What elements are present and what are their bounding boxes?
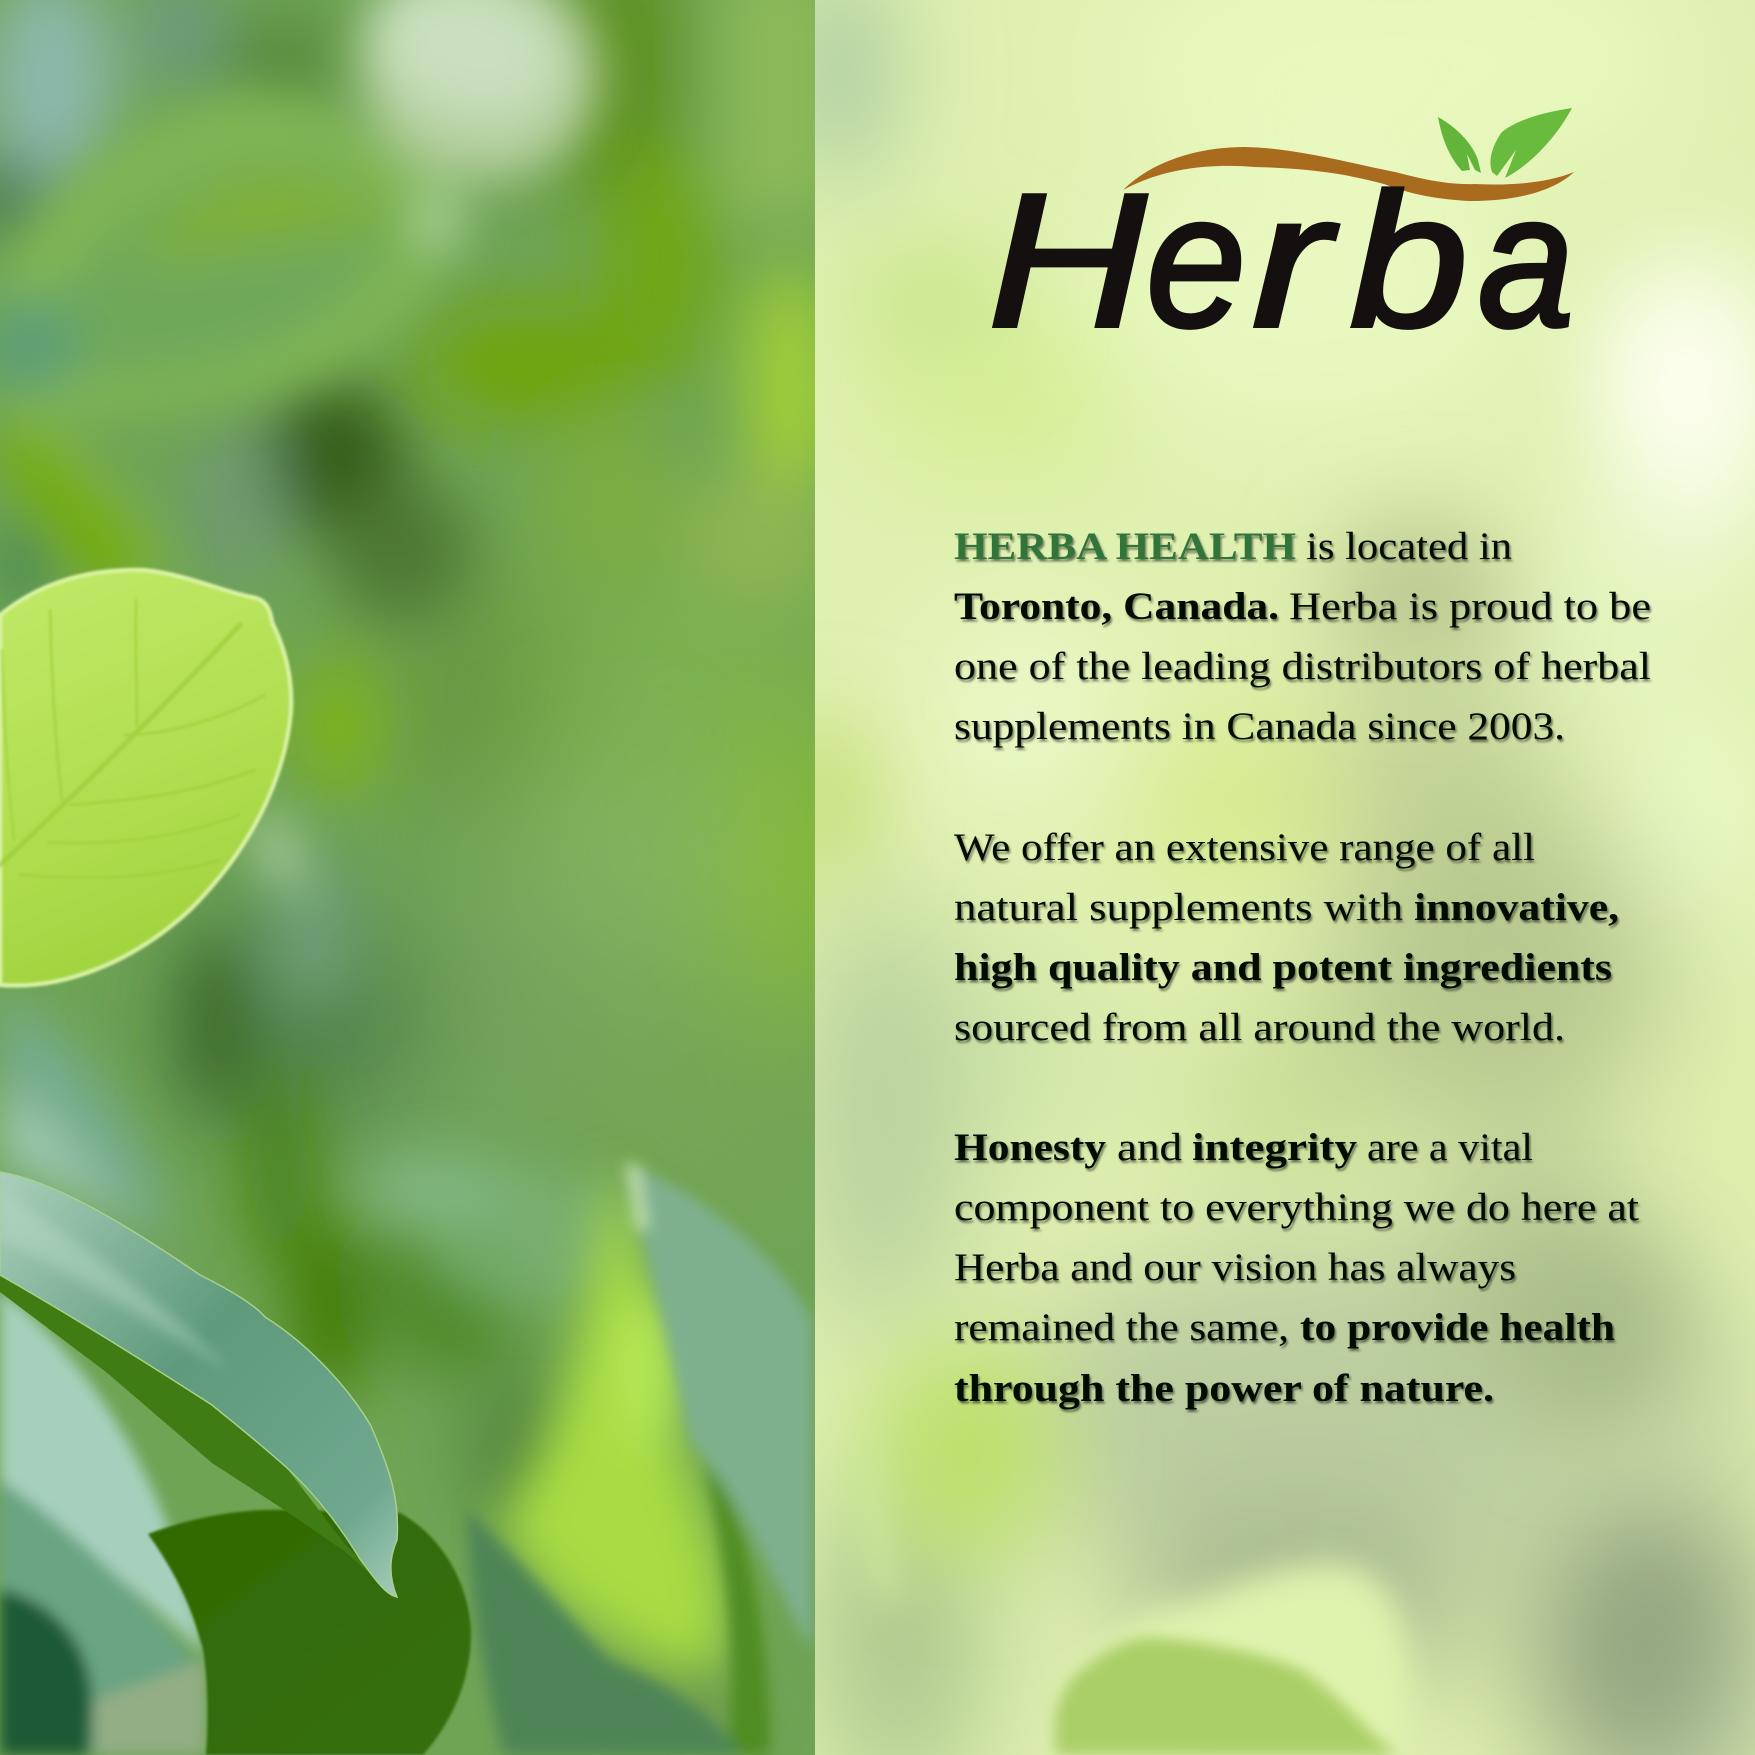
logo wordmark: b — [1350, 155, 1468, 367]
logo leaves — [1438, 117, 1481, 173]
logo wordmark: r — [1252, 155, 1338, 367]
streak near bright leaf — [250, 800, 310, 905]
text: paragraph 2: sourced from all around the world. — [954, 1006, 1565, 1049]
panel: right pale background — [780, 0, 1755, 1755]
logo: Herba — [988, 108, 1574, 367]
text: paragraph 3: through the power of nature. — [954, 1367, 1494, 1410]
text: paragraph 1: Toronto, Canada. — [954, 585, 1279, 628]
text: paragraph 2: We offer an extensive range of all — [954, 826, 1535, 869]
blurred bottom leaf — [1055, 1638, 1396, 1755]
panel: left leaf photograph — [0, 0, 850, 1755]
text: paragraph 1: one of the leading distributors of herbal — [954, 645, 1651, 688]
text: paragraph 1: supplements in Canada since 2003. — [954, 705, 1565, 748]
logo swoosh — [1123, 147, 1574, 201]
text: paragraph 3: integrity — [1192, 1126, 1358, 1169]
logo wordmark: a — [1478, 155, 1574, 367]
text: paragraph 1 — [954, 525, 1651, 748]
dark round leaf — [148, 1510, 471, 1755]
blurred upper leaf — [0, 96, 470, 417]
text: paragraph 3: and — [1117, 1126, 1183, 1169]
logo wordmark: H — [988, 155, 1147, 367]
lower blurred leaves — [0, 1290, 205, 1755]
text: paragraph 2 — [954, 826, 1619, 1049]
text: paragraph 3: to provide health — [1300, 1306, 1615, 1349]
text: paragraph 3: are a vital — [1367, 1126, 1533, 1169]
text: paragraph 1: Herba is proud to be — [1289, 585, 1651, 628]
text: paragraph 3: remained the same, — [954, 1306, 1289, 1349]
text: paragraph 3 — [954, 1126, 1639, 1410]
mid pale leaf band — [365, 1150, 515, 1230]
teal background leaf — [0, 990, 175, 1240]
left small leaf — [0, 409, 138, 569]
crisp bright leaf — [0, 570, 291, 986]
text: paragraph 2: innovative, — [1414, 886, 1619, 929]
text: paragraph 3: Honesty — [954, 1126, 1107, 1169]
logo wordmark: e — [1146, 155, 1246, 367]
text: paragraph 1: is located in — [1306, 525, 1512, 568]
main teal leaf — [0, 1172, 398, 1597]
text: paragraph 1: HERBA HEALTH — [954, 525, 1296, 568]
text: paragraph 3: Herba and our vision has always — [954, 1246, 1516, 1289]
text: paragraph 2: natural supplements with — [954, 886, 1403, 929]
text: paragraph 2: high quality and potent ingredients — [954, 946, 1612, 989]
text: paragraph 3: component to everything we do here at — [954, 1186, 1639, 1229]
pale blurred blob — [330, 0, 630, 214]
